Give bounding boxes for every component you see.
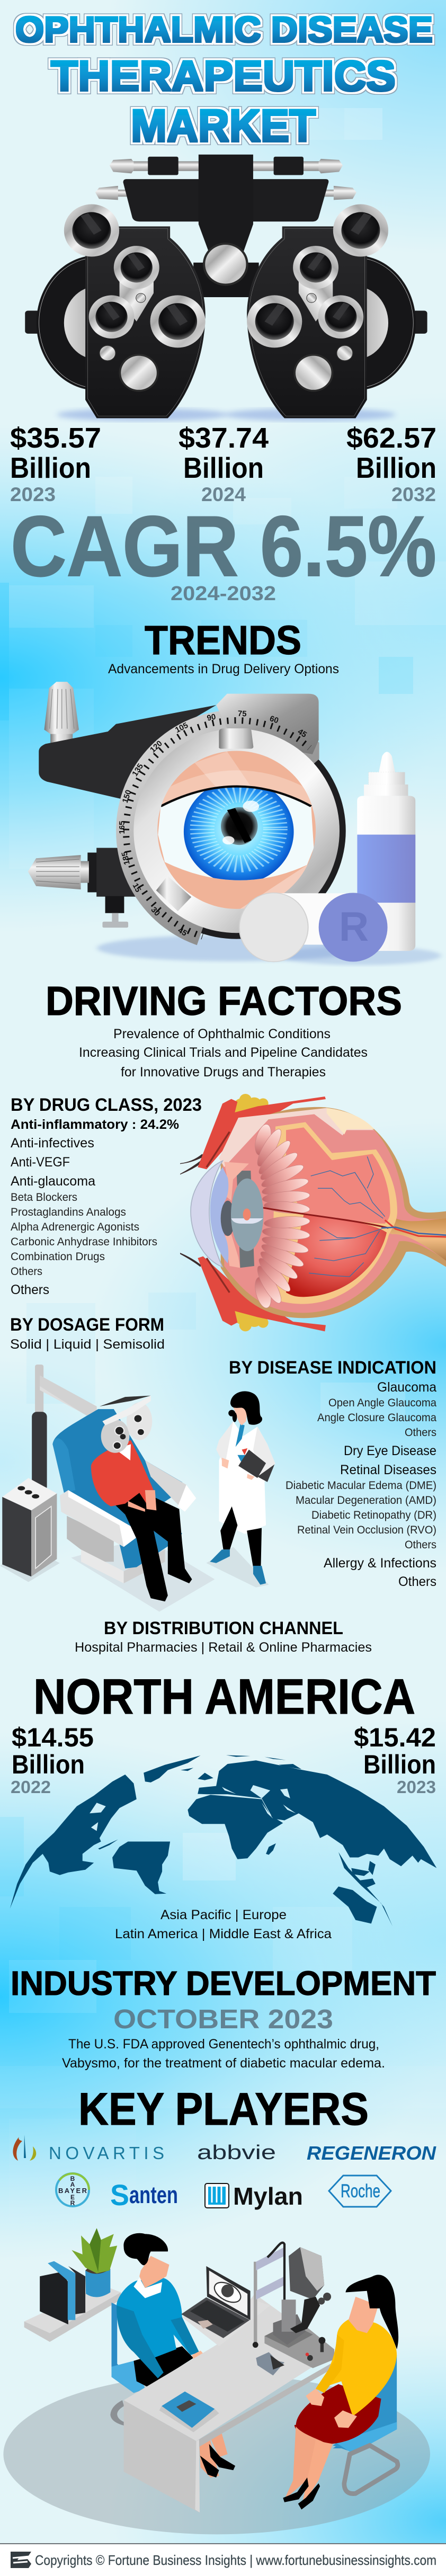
panel: by disease indication: Others bbox=[405, 1427, 436, 1439]
panel: by dosage form: BY DOSAGE FORM bbox=[10, 1315, 164, 1335]
text: driving factors list: Prevalence of Ophthalmic Conditions bbox=[113, 1027, 331, 1041]
illustration: eye examination with eye drops and lens case: 30 bbox=[149, 905, 162, 918]
panel: by drug class: Anti-VEGF bbox=[11, 1155, 70, 1170]
illustration: eye examination with eye drops and lens case: 185 bbox=[120, 851, 132, 866]
panel: by drug class: Anti-inflammatory : 24.2% bbox=[11, 1117, 179, 1132]
stat: 2032 market size bbox=[346, 422, 436, 505]
illustration: eye examination with eye drops and lens case: 45 bbox=[296, 727, 308, 739]
panel: by drug class: Carbonic Anhydrase Inhibitors bbox=[11, 1236, 157, 1248]
illustration: eye examination with eye drops and lens case: 60 bbox=[269, 714, 280, 725]
stat: north america 2023: Billion bbox=[363, 1750, 436, 1779]
panel: by disease indication: Open Angle Glaucoma bbox=[328, 1397, 436, 1409]
panel: by disease indication: Allergy & Infections bbox=[324, 1556, 436, 1571]
panel: by drug class: Anti-infectives bbox=[11, 1136, 94, 1151]
text: development detail: Vabysmo, for the treatment of diabetic macular edema. bbox=[62, 2056, 385, 2071]
illustration: eye examination with eye drops and lens case: 105 bbox=[174, 721, 190, 735]
illustration: eye examination with eye drops and lens case: 15 bbox=[131, 882, 142, 894]
stat: 2032 market size: Billion bbox=[356, 451, 436, 484]
heading: key players: KEY PLAYERS bbox=[78, 2084, 369, 2135]
stat: north america 2022 bbox=[11, 1723, 94, 1797]
date: october 2023: OCTOBER 2023 bbox=[113, 2004, 333, 2034]
illustration: eye examination with eye drops and lens case: 45 bbox=[176, 926, 189, 938]
panel: by disease indication: Angle Closure Glaucoma bbox=[317, 1412, 436, 1424]
panel: by drug class: Combination Drugs bbox=[11, 1251, 105, 1263]
heading: driving factors: DRIVING FACTORS bbox=[46, 978, 402, 1024]
stat: 2024 market size: 2024 bbox=[201, 484, 246, 505]
logo: bayer: A bbox=[70, 2181, 75, 2188]
logo: novartis bbox=[13, 2135, 164, 2163]
text: driving factors list: for Innovative Drugs and Therapies bbox=[121, 1065, 326, 1080]
panel: by drug class bbox=[11, 1095, 202, 1297]
stat: 2023 market size bbox=[10, 422, 101, 505]
logo: roche: Roche bbox=[341, 2181, 380, 2201]
footer bbox=[0, 2543, 446, 2576]
text: other regions bbox=[115, 1908, 332, 1941]
panel: by disease indication: Retinal Vein Occlusion (RVO) bbox=[297, 1524, 436, 1536]
panel: by disease indication bbox=[229, 1358, 436, 1589]
stat: 2024 market size: Billion bbox=[183, 451, 264, 484]
heading: industry development: INDUSTRY DEVELOPMENT bbox=[11, 1964, 436, 2002]
stat: north america 2023 bbox=[354, 1723, 436, 1797]
illustration: eye anatomy cross-section bbox=[180, 1094, 446, 1331]
panel: by distribution channel: Hospital Pharmacies | Retail & Online Pharmacies bbox=[75, 1640, 372, 1655]
stat: north america 2022: Billion bbox=[12, 1750, 85, 1779]
logo: bayer bbox=[56, 2173, 89, 2207]
stat: 2032 market size: 2032 bbox=[391, 484, 436, 505]
panel: by disease indication: Dry Eye Disease bbox=[344, 1443, 436, 1458]
logo: regeneron: REGENERON bbox=[307, 2142, 436, 2164]
stat: north america 2023: 2023 bbox=[397, 1777, 436, 1797]
text: driving factors list bbox=[79, 1027, 368, 1080]
illustration: eye examination with eye drops and lens case bbox=[28, 682, 441, 965]
text: driving factors list: Increasing Clinical Trials and Pipeline Candidates bbox=[79, 1045, 368, 1060]
text: other regions: Asia Pacific | Europe bbox=[160, 1908, 287, 1922]
panel: by disease indication: Diabetic Retinopathy (DR) bbox=[311, 1509, 436, 1521]
panel: by distribution channel bbox=[75, 1618, 372, 1655]
stat: 2023 market size: Billion bbox=[10, 451, 91, 484]
panel: by drug class: Anti-glaucoma bbox=[11, 1174, 95, 1189]
panel: by disease indication: Others bbox=[398, 1574, 436, 1589]
stat: 2023 market size: $35.57 bbox=[10, 422, 101, 454]
stat: north america 2022: $14.55 bbox=[12, 1723, 94, 1752]
panel: by disease indication: Retinal Diseases bbox=[340, 1463, 436, 1477]
panel: by disease indication: Diabetic Macular Edema (DME) bbox=[286, 1479, 436, 1492]
text: development detail: The U.S. FDA approved Genentech’s ophthalmic drug, bbox=[68, 2037, 379, 2052]
logo: abbvie: abbvie bbox=[197, 2142, 276, 2164]
stat: 2023 market size: 2023 bbox=[10, 484, 56, 505]
title: OPHTHALMIC DISEASE bbox=[15, 10, 433, 50]
text: development detail bbox=[62, 2037, 385, 2071]
illustration: eye examination with eye drops and lens case: 150 bbox=[121, 789, 133, 804]
illustration: phoropter bbox=[25, 155, 427, 421]
map: world bbox=[10, 1755, 436, 1926]
title bbox=[15, 10, 433, 151]
illustration: eye examination with eye drops and lens case: 135 bbox=[130, 762, 145, 778]
panel: by dosage form: Solid | Liquid | Semisolid bbox=[10, 1337, 165, 1352]
illustration: eye examination with eye drops and lens case: 75 bbox=[237, 709, 247, 718]
panel: by distribution channel: BY DISTRIBUTION CHANNEL bbox=[104, 1618, 343, 1638]
stat: 2024 market size: $37.74 bbox=[179, 422, 269, 454]
logo: bayer: R bbox=[70, 2199, 75, 2207]
logo: bayer: E bbox=[70, 2194, 75, 2201]
panel: by disease indication: BY DISEASE INDICATION bbox=[229, 1358, 436, 1378]
title: MARKET bbox=[131, 101, 316, 151]
text: other regions: Latin America | Middle East & Africa bbox=[115, 1927, 332, 1941]
title: THERAPEUTICS bbox=[51, 52, 396, 100]
panel: by disease indication: Macular Degeneration (AMD) bbox=[296, 1494, 436, 1507]
logo: fortune business insights bbox=[11, 2552, 31, 2568]
heading: north america: NORTH AMERICA bbox=[33, 1669, 415, 1724]
panel: by disease indication: Glaucoma bbox=[377, 1380, 436, 1395]
panel: by drug class: Beta Blockers bbox=[11, 1191, 77, 1204]
panel: by dosage form bbox=[10, 1315, 165, 1352]
logo: mylan: Mylan bbox=[233, 2182, 303, 2210]
text: trends item: Advancements in Drug Delivery Options bbox=[108, 662, 339, 676]
panel: by drug class: Prostaglandins Analogs bbox=[11, 1206, 126, 1218]
illustration: doctor consultation at desk bbox=[3, 2228, 430, 2534]
logo: bayer: B bbox=[70, 2175, 75, 2182]
panel: by disease indication: Others bbox=[405, 1539, 436, 1551]
panel: by drug class: Others bbox=[11, 1282, 49, 1297]
stat: 2032 market size: $62.57 bbox=[346, 422, 436, 454]
logo: santen bbox=[110, 2178, 178, 2212]
panel: by drug class: Others bbox=[11, 1265, 42, 1278]
stat: 2024 market size bbox=[179, 422, 269, 505]
illustration: eye examination with eye drops and lens case: R bbox=[339, 903, 369, 950]
stat: north america 2022: 2022 bbox=[11, 1777, 51, 1797]
CAGR period: 2024-2032 bbox=[171, 583, 276, 605]
logo: novartis: NOVARTIS bbox=[49, 2143, 164, 2163]
stat: north america 2023: $15.42 bbox=[354, 1723, 436, 1752]
illustration: eye examination with eye drops and lens case: 165 bbox=[118, 821, 127, 834]
illustration: eye examination with eye drops and lens case: 120 bbox=[148, 739, 164, 754]
illustration: patient in exam chair with doctor bbox=[0, 1365, 275, 1612]
panel: by drug class: Alpha Adrenergic Agonists bbox=[11, 1221, 139, 1233]
logo: santen: anten bbox=[129, 2181, 178, 2208]
logo: bayer: BAYER bbox=[58, 2187, 87, 2195]
heading: trends: TRENDS bbox=[145, 618, 301, 663]
logo: roche bbox=[329, 2176, 391, 2207]
illustration: eye examination with eye drops and lens case: 90 bbox=[206, 712, 217, 723]
logo: santen: S bbox=[110, 2178, 129, 2212]
panel: by drug class: BY DRUG CLASS, 2023 bbox=[11, 1095, 202, 1115]
